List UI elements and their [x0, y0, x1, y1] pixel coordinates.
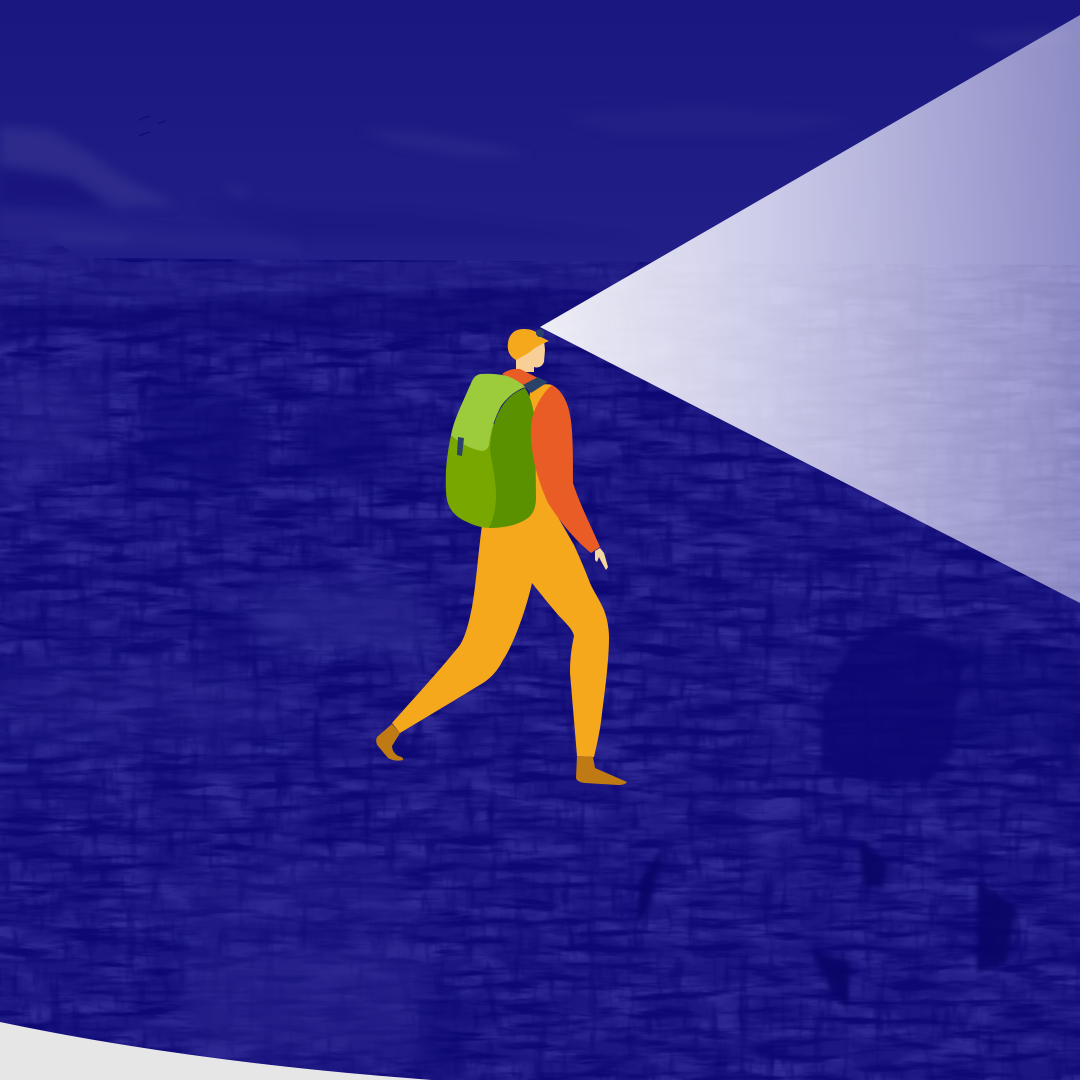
shadow and light masses [2, 382, 461, 1072]
shirt sleeve [531, 385, 600, 553]
backpack tag [457, 437, 464, 456]
front foot [576, 756, 627, 785]
backpack flap [451, 374, 525, 451]
shirt collar [502, 369, 538, 388]
rock strata texture [0, 230, 1080, 1080]
dark butte [820, 628, 963, 783]
canyon landscape [0, 230, 1080, 1080]
back foot [376, 724, 403, 761]
bottom-left light curve [0, 1022, 432, 1080]
neck and face [516, 340, 545, 372]
hiker figure [376, 329, 627, 785]
sky background [0, 0, 1080, 300]
cap [508, 329, 549, 360]
backpack strap [523, 377, 548, 393]
deep crevices [636, 840, 1017, 1007]
light rock masses [0, 230, 1080, 1080]
backpack [446, 374, 536, 528]
vertical rock ribs [0, 230, 1080, 1080]
sky shadows [0, 170, 640, 240]
distant mesa [0, 240, 640, 305]
hand [595, 548, 608, 570]
clouds [0, 28, 1080, 255]
light beam from headlamp [540, 15, 1080, 603]
birds [139, 116, 166, 136]
butte right wall [958, 646, 1080, 758]
canyon base [114, 260, 639, 290]
headlamp [536, 329, 544, 337]
mesa shadow band [0, 286, 640, 330]
backpack side panel [489, 388, 536, 528]
legs and torso [392, 384, 609, 757]
backpack body [446, 420, 510, 528]
